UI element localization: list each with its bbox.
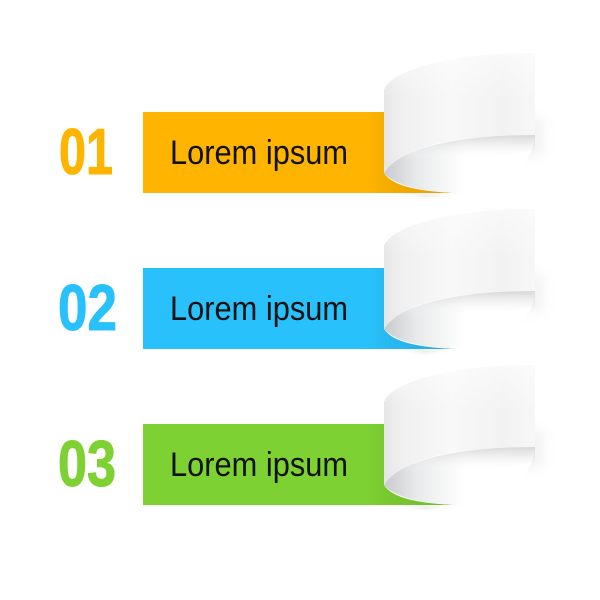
ribbon 03 [58, 365, 543, 509]
bar: orange [143, 112, 384, 193]
number 02: 02 [58, 271, 117, 344]
ribbon 01 [59, 53, 543, 197]
number 03: 03 [58, 427, 116, 500]
number 01: 01 [59, 115, 113, 188]
bar: blue [143, 268, 384, 349]
paper curl [366, 53, 543, 197]
label: Lorem ipsum [170, 446, 348, 484]
paper curl [366, 365, 543, 509]
ribbon 02 [58, 209, 543, 353]
paper curl [366, 209, 543, 353]
bar: green [143, 424, 384, 505]
label: Lorem ipsum [170, 134, 348, 172]
label: Lorem ipsum [170, 290, 348, 328]
